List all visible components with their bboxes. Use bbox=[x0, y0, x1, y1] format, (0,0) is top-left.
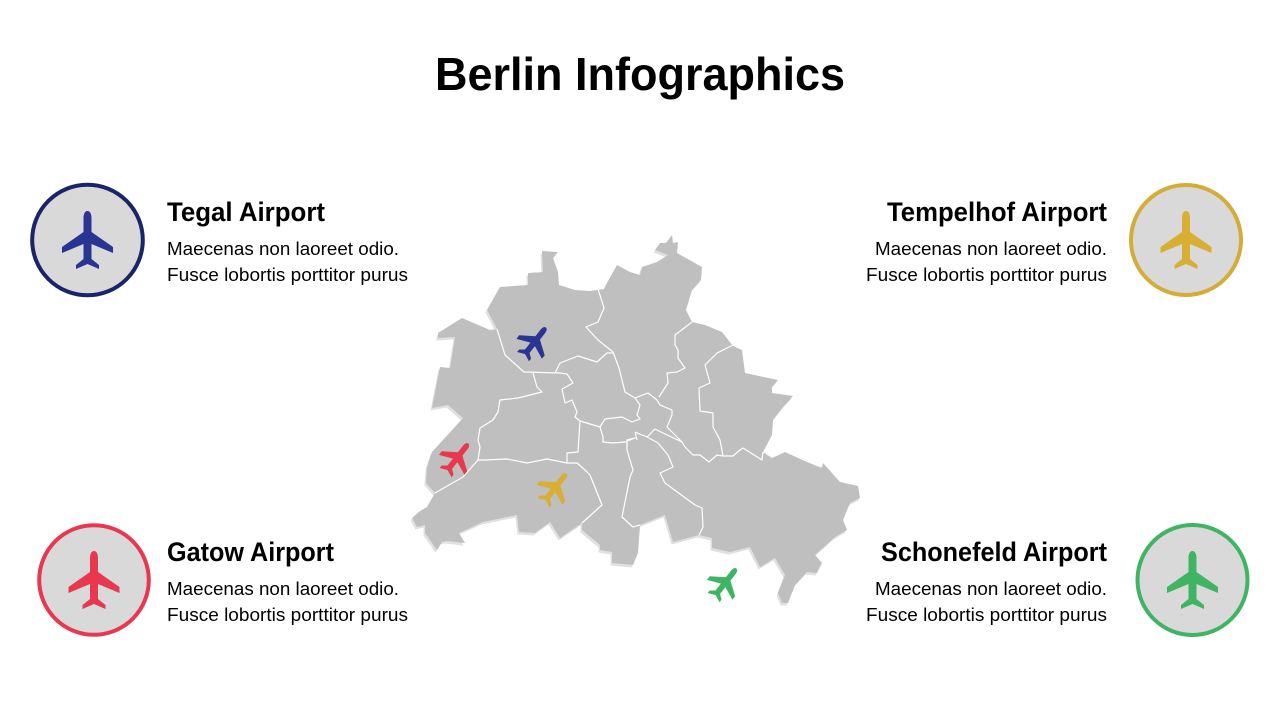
map marker: Gatow plane bbox=[433, 434, 481, 482]
map of Berlin bbox=[410, 235, 860, 607]
text block: Schonefeld airport: Maecenas non laoreet odio. bbox=[875, 579, 1107, 599]
icon: Tempelhof airport bbox=[1131, 185, 1241, 295]
text block: Tempelhof airport: Tempelhof Airport bbox=[887, 197, 1107, 227]
text block: Gatow airport: Fusce lobortis porttitor purus bbox=[167, 605, 408, 625]
text block: Gatow airport: Gatow Airport bbox=[167, 537, 334, 567]
text block: Tegal airport: Fusce lobortis porttitor purus bbox=[167, 265, 408, 285]
text block: Tempelhof airport: Fusce lobortis porttitor purus bbox=[866, 265, 1107, 285]
map marker: Schonefeld plane bbox=[701, 559, 749, 607]
map marker: Tempelhof plane bbox=[531, 464, 579, 512]
text block: Tegal airport bbox=[167, 197, 408, 285]
text block: Tempelhof airport bbox=[866, 197, 1107, 285]
text block: Tegal airport: Maecenas non laoreet odio. bbox=[167, 239, 399, 259]
text block: Gatow airport: Maecenas non laoreet odio. bbox=[167, 579, 399, 599]
icon: Schonefeld airport bbox=[1138, 525, 1248, 635]
text block: Schonefeld airport: Schonefeld Airport bbox=[881, 537, 1107, 567]
map marker: Tegal plane bbox=[511, 318, 558, 366]
title: Berlin Infographics bbox=[435, 48, 845, 100]
text block: Gatow airport bbox=[167, 537, 408, 625]
text block: Schonefeld airport bbox=[866, 537, 1107, 625]
text block: Tempelhof airport: Maecenas non laoreet odio. bbox=[875, 239, 1107, 259]
icon: Tegal airport bbox=[32, 185, 143, 295]
icon: Gatow airport bbox=[39, 525, 149, 635]
text block: Schonefeld airport: Fusce lobortis porttitor purus bbox=[866, 605, 1107, 625]
text block: Tegal airport: Tegal Airport bbox=[167, 197, 325, 227]
